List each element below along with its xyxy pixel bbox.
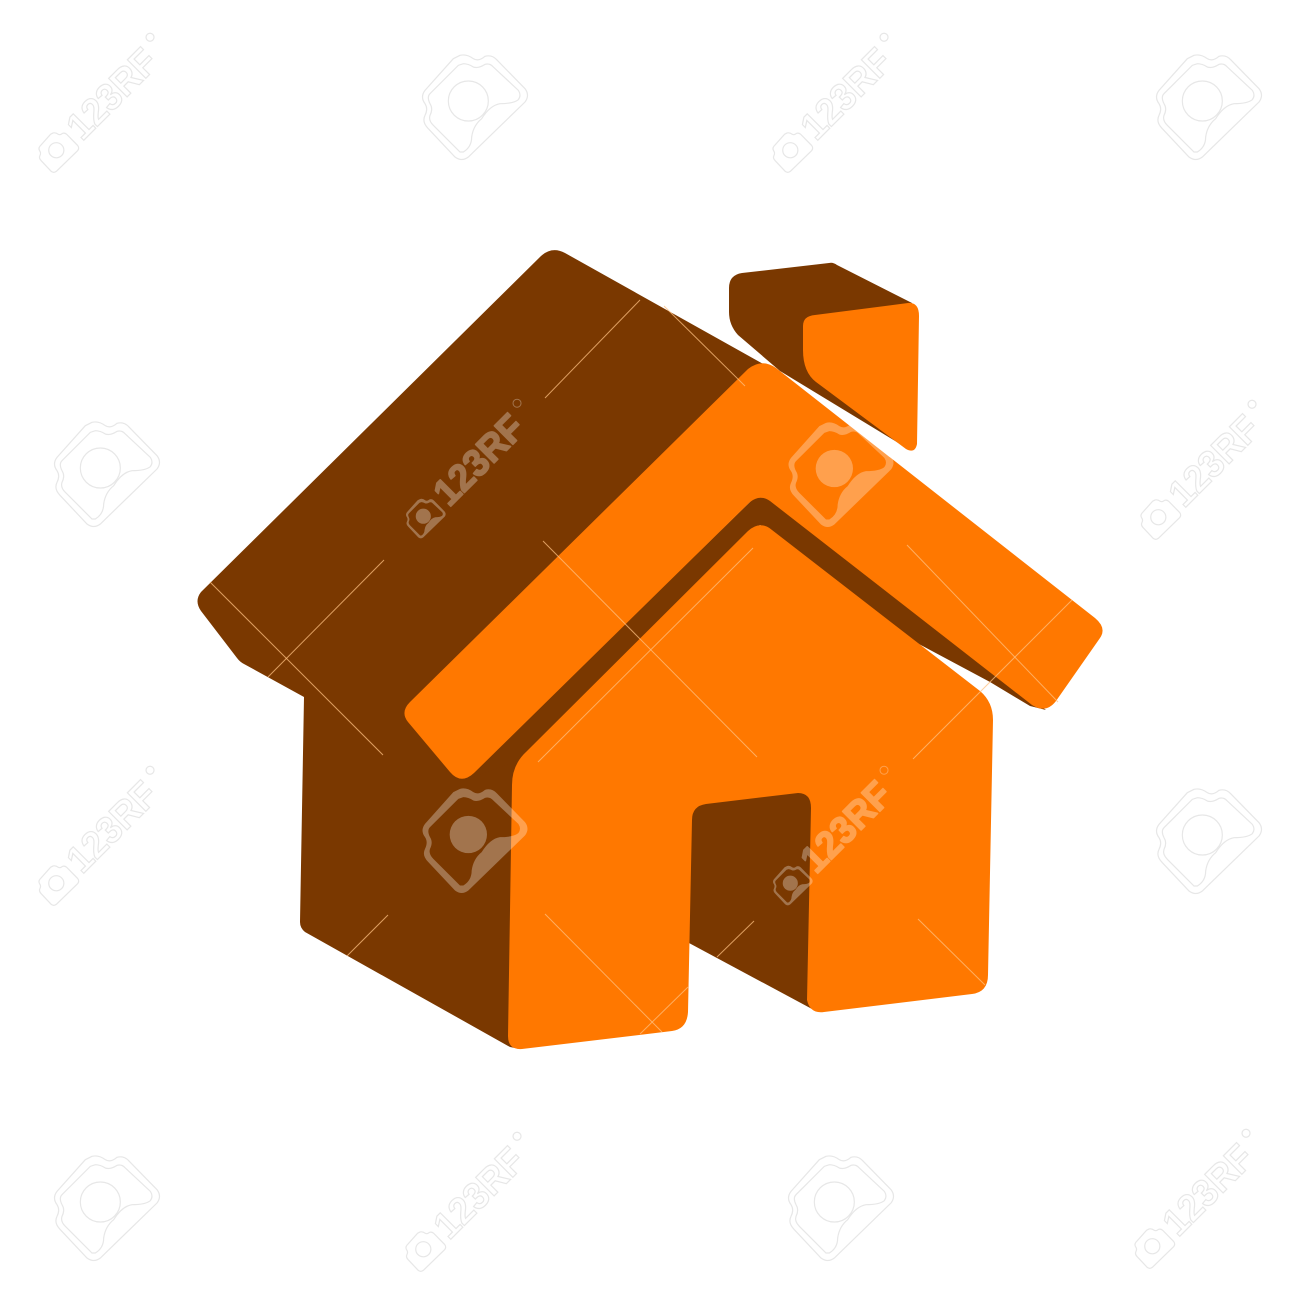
watermarks on white background: 123RF [793,41,900,148]
icon: house [198,250,1103,1049]
watermarks over house: 123RF [426,407,533,514]
door interior [689,790,812,1009]
fill between side and front [470,362,760,1049]
watermark hairlines [210,300,1072,1034]
chimney side [729,263,916,448]
watermarks on white background: 123RF [426,1140,533,1247]
house side wall and roof slope [198,250,765,1049]
watermarks on white background: 123RF [59,774,166,881]
watermarks on white background: 123RF [1161,408,1268,515]
roof band [404,363,1103,779]
roof underside shadow [465,496,1046,780]
watermarks over house: 123RF [793,774,900,881]
watermarks over house [386,393,919,925]
watermarks on white background: 123RF [59,41,166,148]
front wall [508,525,993,1049]
watermarks on white background: 123RF [1155,1137,1262,1244]
chimney front [803,303,919,451]
